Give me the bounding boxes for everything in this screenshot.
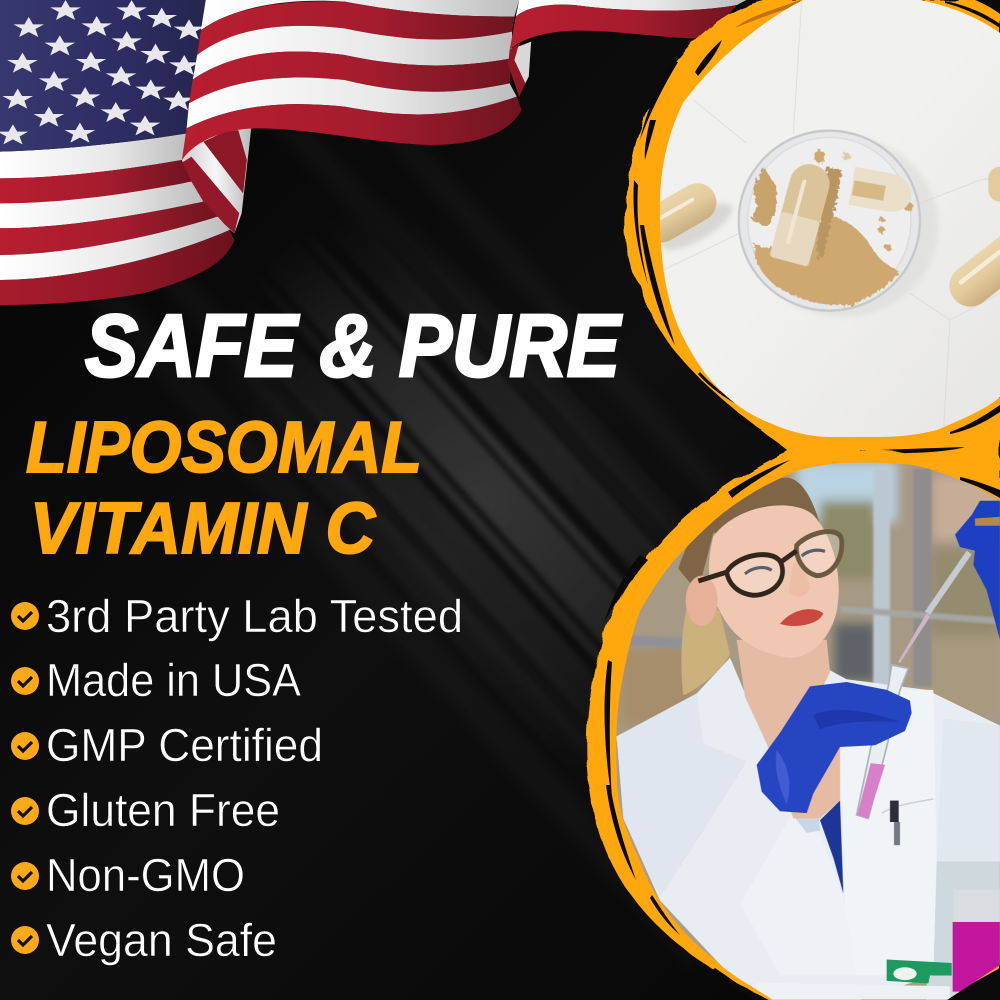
item: made in usa: Made in USA (46, 654, 301, 706)
capsule right top (988, 167, 1000, 202)
neck and chest (737, 640, 840, 818)
pipette collar (975, 517, 1000, 526)
headline: safe and pure: SAFE & PURE (85, 296, 622, 395)
magenta beaker (953, 890, 1000, 992)
flag fold behind left section (179, 128, 251, 233)
glasses and eyes (698, 532, 842, 595)
lab coat (617, 658, 1000, 1000)
orange brush ring: bottom (587, 445, 1000, 1000)
orange brush ring: top (625, 0, 1000, 470)
blurred lab window background (613, 461, 1000, 747)
product name (26, 408, 422, 569)
dish shadow (814, 145, 938, 316)
lab bench background (927, 858, 1000, 1000)
dark top under coat (820, 801, 843, 893)
item: 3rd party lab tested: 3rd Party Lab Tested (46, 590, 463, 642)
flag blue canton (0, 0, 207, 152)
capsule in dish upright (770, 164, 830, 266)
hair (678, 477, 822, 695)
pipette (898, 551, 972, 663)
flag central wave stripes (182, 0, 522, 160)
flag stars (0, 0, 204, 144)
item: gmp certified: GMP Certified (46, 719, 323, 771)
item: non-gmo: Non-GMO (46, 849, 245, 901)
product name: VITAMIN C (30, 489, 376, 569)
green instrument on bench (861, 960, 952, 1000)
capsule left (660, 183, 717, 243)
photo: scientist with test tube in lab (616, 462, 1000, 1000)
petri dish (739, 131, 920, 311)
capsule left shadow (661, 202, 733, 251)
American flag (0, 0, 746, 305)
capsule in dish half open (848, 167, 912, 212)
capsule right bottom (949, 236, 1000, 307)
flag left stripes (0, 133, 234, 305)
item: gluten free: Gluten Free (46, 784, 280, 836)
item: vegan safe: Vegan Safe (46, 914, 277, 966)
pen in pocket (882, 799, 933, 845)
photo: capsules and powder in a petri dish on white marble (660, 0, 1000, 437)
flag right wave stripes (508, 0, 746, 97)
test tube with pink liquid (857, 665, 908, 818)
product name: LIPOSOMAL (26, 408, 422, 488)
checklist of quality claims (11, 590, 463, 966)
blue glove left hand (757, 682, 912, 813)
blue glove right hand (955, 501, 1000, 640)
window frame columns (623, 469, 1000, 686)
marble veins (663, 0, 1000, 433)
face (686, 505, 839, 658)
powder pile (752, 151, 913, 306)
